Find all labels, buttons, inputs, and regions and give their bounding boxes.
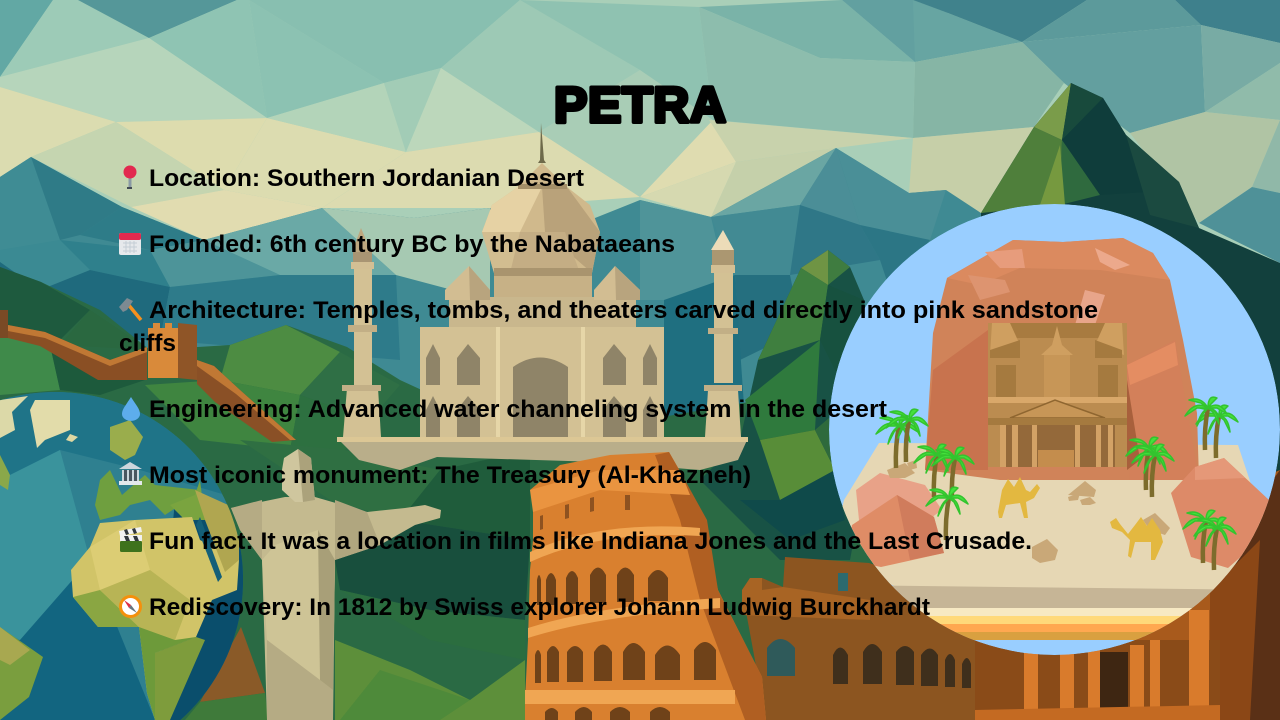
icon: hammer	[119, 298, 141, 320]
icon: compass	[120, 596, 140, 616]
right boulder	[1171, 458, 1269, 568]
background: blue mountains	[0, 148, 1280, 420]
fact: rediscovery: Rediscovery: In 1812 by Swiss explorer Johann Ludwig Burckhardt	[149, 594, 930, 621]
desert ground	[829, 443, 1280, 640]
petra facade at lower right	[975, 470, 1280, 720]
background: green peak	[981, 83, 1280, 480]
camel two	[1110, 517, 1163, 560]
left small dome	[445, 266, 490, 300]
icon: pin	[124, 166, 136, 189]
background: green hills	[0, 250, 1000, 720]
icon: calendar	[119, 233, 141, 255]
main dome	[482, 123, 600, 297]
fact: architecture	[119, 297, 1098, 357]
icon: classical building	[119, 462, 142, 485]
fact: monument: Most iconic monument: The Treasury (Al-Khazneh)	[149, 462, 751, 489]
sandstone cliff	[925, 238, 1199, 480]
taj mahal	[337, 123, 748, 470]
fact: architecture: cliffs	[119, 330, 176, 357]
fact: location: Location: Southern Jordanian Desert	[149, 165, 584, 192]
desert stones	[887, 460, 1170, 563]
title: PETRA	[554, 77, 726, 133]
camel one	[998, 477, 1040, 518]
right minaret	[704, 230, 742, 437]
left minaret	[342, 228, 381, 437]
christ the redeemer statue	[231, 449, 441, 720]
great wall	[0, 310, 296, 442]
left boulders	[846, 473, 944, 567]
colosseum	[525, 452, 980, 720]
fact: fun fact: Fun fact: It was a location in films like Indiana Jones and the Last Crusade.	[149, 528, 1032, 555]
icon: water drop	[122, 397, 140, 421]
fact: architecture: Architecture: Temples, tombs, and theaters carved directly into pink sandstone	[149, 297, 1098, 324]
globe	[0, 392, 243, 720]
icon: clapper board	[119, 527, 142, 552]
fact: engineering: Engineering: Advanced water channeling system in the desert	[149, 396, 887, 423]
circular petra illustration	[829, 204, 1280, 655]
right small dome	[594, 266, 640, 300]
palm trees	[876, 397, 1238, 570]
fact: founded: Founded: 6th century BC by the Nabataeans	[149, 231, 675, 258]
background: low-poly sky	[0, 0, 1280, 320]
treasury facade	[988, 323, 1127, 467]
